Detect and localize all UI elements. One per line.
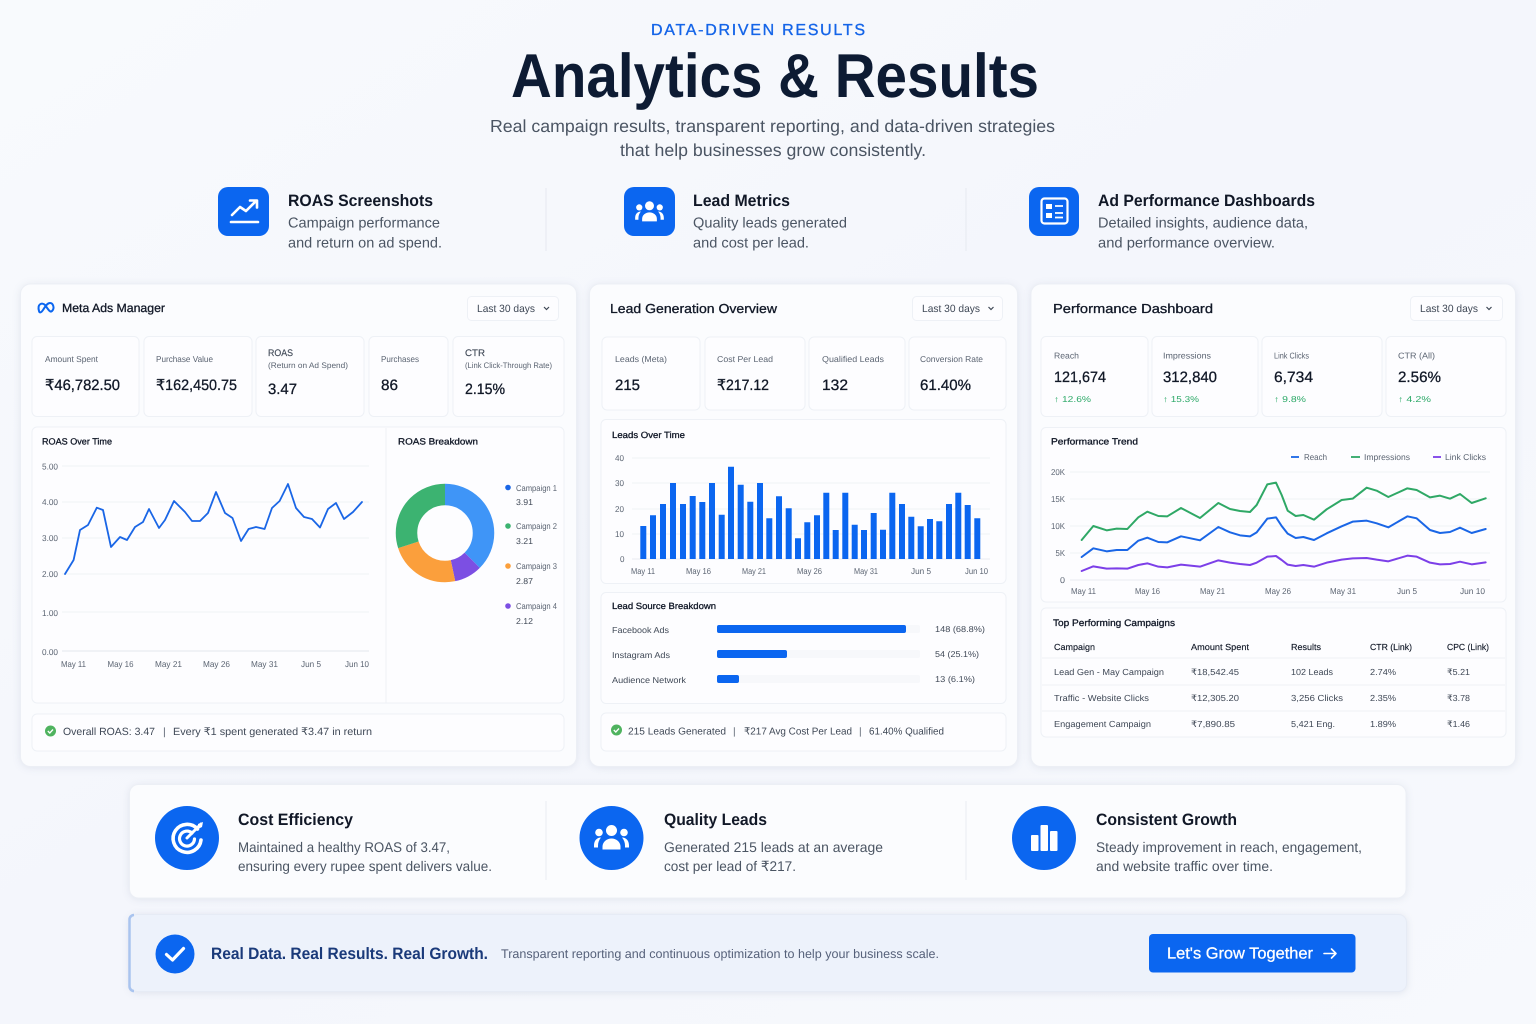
legend: Link Clicks [1445, 452, 1486, 462]
feature text: and return on ad spend. [288, 236, 442, 252]
legend: 2.12 [516, 616, 533, 626]
feature: Lead Metrics [624, 187, 847, 252]
bar chart: Leads Over Time: 30 [615, 478, 624, 488]
KPI: Cost Per Lead: Cost Per Lead [717, 354, 773, 364]
subtitle: Real campaign results, transparent reporting, and data-driven strategies [490, 116, 1055, 136]
table row: 5,421 Eng. [1291, 719, 1335, 729]
summary strip: 215 Leads Generated [628, 726, 726, 738]
summary strip: | [733, 726, 736, 738]
KPI: Cost Per Lead [705, 337, 805, 410]
benefit text: cost per lead of ₹217. [664, 858, 796, 874]
line chart: Performance Trend: May 11 [1071, 586, 1096, 596]
panel: Meta Ads Manager [20, 284, 576, 766]
source: Facebook Ads: 148 (68.8%) [935, 624, 985, 634]
line chart: ROAS Over Time: May 31 [251, 659, 278, 669]
feature text: ROAS Screenshots [288, 192, 433, 210]
table row: ₹5.21 [1447, 667, 1470, 677]
feature text: Detailed insights, audience data, [1098, 216, 1308, 232]
chart card: ROAS [32, 427, 564, 703]
KPI: Purchases: 86 [381, 377, 398, 394]
panel: Performance Dashboard [1031, 284, 1516, 766]
source: Instagram Ads [612, 649, 979, 660]
line chart: ROAS Over Time: ROAS Over Time [42, 436, 112, 446]
donut chart: ROAS Breakdown [398, 436, 557, 626]
bar chart: Leads Over Time: May 11 [631, 566, 655, 576]
KPI: Reach: Reach [1054, 350, 1079, 360]
summary strip [601, 713, 1006, 751]
eyebrow: DATA-DRIVEN RESULTS [651, 22, 865, 39]
icon: bars [1012, 806, 1076, 870]
bar chart: Leads Over Time: 40 [615, 453, 624, 463]
KPI: CTR (All): 2.56% [1398, 369, 1441, 386]
feature text [288, 192, 442, 252]
feature text: and performance overview. [1098, 236, 1275, 252]
line chart: ROAS Over Time: Jun 5 [301, 659, 321, 669]
benefit text: Consistent Growth [1096, 811, 1237, 829]
KPI: ROAS: ROAS [268, 348, 293, 359]
benefit text: ensuring every rupee spent delivers value. [238, 858, 492, 874]
subtitle [490, 116, 1055, 160]
table row [1054, 693, 1470, 703]
KPI: CTR: (Link Click-Through Rate) [465, 361, 552, 370]
table header: CTR (Link) [1370, 642, 1412, 652]
benefit text: Maintained a healthy ROAS of 3.47, [238, 839, 450, 855]
table row: Traffic - Website Clicks [1054, 693, 1150, 703]
icon: people [624, 187, 675, 236]
KPI: Impressions: 312,840 [1163, 369, 1217, 386]
bar chart: Leads Over Time: 20 [615, 504, 624, 514]
icon: dashboard [1029, 187, 1079, 236]
KPI: Reach: 121,674 [1054, 369, 1106, 386]
line chart: ROAS Over Time: 1.00 [42, 608, 58, 618]
table: Top Performing Campaigns: Top Performing Campaigns [1053, 618, 1175, 629]
source: Facebook Ads [612, 624, 985, 635]
subtitle: that help businesses grow consistently. [620, 140, 926, 160]
feature text [693, 192, 847, 252]
donut chart: ROAS Breakdown: ROAS Breakdown [398, 436, 478, 446]
icon: target [155, 806, 219, 870]
source: Instagram Ads: Instagram Ads [612, 650, 670, 660]
table row [1054, 667, 1470, 677]
KPI: Purchase Value [144, 336, 252, 416]
KPI: Purchase Value: Purchase Value [156, 354, 213, 364]
icon: people [580, 806, 644, 870]
line chart: ROAS Over Time: 2.00 [42, 569, 58, 579]
panel: benefits [130, 784, 1406, 898]
KPI: Link Clicks: Link Clicks [1274, 350, 1309, 360]
table header: Amount Spent [1191, 642, 1250, 652]
banner description: Transparent reporting and continuous optimization to help your business scale. [501, 947, 939, 961]
date dropdown: Last 30 days [1420, 303, 1478, 315]
line chart: Performance Trend: 20K [1051, 467, 1065, 477]
benefit text: and website traffic over time. [1096, 858, 1273, 874]
KPI: Amount Spent: Amount Spent [45, 354, 99, 364]
summary strip [32, 714, 564, 751]
line chart: ROAS Over Time: May 11 [61, 659, 86, 669]
benefit: Consistent Growth [1012, 806, 1362, 874]
summary strip: Overall ROAS: 3.47 [63, 726, 155, 738]
legend: 2.87 [516, 576, 533, 586]
table row [1054, 719, 1470, 729]
benefit: Cost Efficiency [155, 806, 492, 874]
benefit: Quality Leads [580, 806, 883, 874]
feature: Ad Performance Dashboards [1029, 187, 1315, 252]
KPI: Link Clicks [1262, 336, 1382, 416]
date dropdown [1410, 296, 1502, 320]
table row: ₹1.46 [1447, 719, 1470, 729]
KPI: Leads (Meta): 215 [615, 377, 640, 394]
legend: 3.21 [516, 536, 533, 546]
bar chart: Leads Over Time: May 21 [742, 566, 766, 576]
line chart: Performance Trend: Jun 10 [1460, 586, 1485, 596]
KPI: CTR [453, 336, 564, 416]
benefit text: Cost Efficiency [238, 811, 354, 829]
KPI: Amount Spent: ₹46,782.50 [45, 377, 120, 394]
table row: 3,256 Clicks [1291, 693, 1344, 703]
line chart: Performance Trend: Jun 5 [1397, 586, 1417, 596]
legend: Campaign 2 [516, 521, 557, 531]
button [1149, 934, 1356, 972]
source: Instagram Ads: 54 (25.1%) [935, 649, 979, 659]
summary strip: ₹217 Avg Cost Per Lead [744, 726, 852, 738]
table header: Results [1291, 642, 1322, 652]
summary strip: | [859, 726, 862, 738]
legend: Campaign 3 [516, 561, 557, 571]
summary strip: Every ₹1 spent generated ₹3.47 in return [173, 726, 372, 738]
KPI: CTR: CTR [465, 348, 485, 359]
feature text: Campaign performance [288, 216, 440, 232]
call to action banner [130, 914, 1406, 992]
table row: Engagement Campaign [1054, 719, 1151, 729]
benefit text [1096, 811, 1362, 874]
KPI: Impressions [1152, 336, 1258, 416]
KPI: Purchase Value: ₹162,450.75 [156, 377, 237, 394]
KPI: ROAS [256, 336, 364, 416]
line chart: Performance Trend: 5K [1056, 548, 1065, 558]
bar chart: Leads Over Time: Jun 5 [911, 566, 931, 576]
line chart: Performance Trend: May 26 [1265, 586, 1291, 596]
feature row [218, 187, 1315, 252]
line chart: Performance Trend: 15K [1051, 494, 1065, 504]
benefit text: Generated 215 leads at an average [664, 839, 883, 855]
KPI: ROAS: 3.47 [268, 381, 297, 398]
line chart: Performance Trend [1041, 428, 1506, 602]
line chart: ROAS Over Time: 5.00 [42, 462, 58, 472]
legend: Impressions [1364, 452, 1410, 462]
bar chart: Leads Over Time: 10 [615, 529, 624, 539]
KPI: Reach: ↑ 12.6% [1054, 394, 1092, 404]
table row: ₹12,305.20 [1191, 693, 1239, 703]
table row: ₹3.78 [1447, 693, 1470, 703]
table row: Lead Gen - May Campaign [1054, 667, 1164, 677]
table header: CPC (Link) [1447, 642, 1489, 652]
table header [1054, 642, 1489, 652]
KPI: ROAS: (Return on Ad Spend) [268, 361, 348, 370]
KPI: CTR: 2.15% [465, 381, 505, 398]
legend: Campaign 1 [516, 483, 557, 493]
line chart: ROAS Over Time [42, 436, 369, 669]
KPI: Link Clicks: 6,734 [1274, 369, 1313, 386]
bar chart: Leads Over Time [601, 420, 1006, 584]
benefit text [238, 811, 492, 874]
KPI: Qualified Leads: 132 [822, 377, 848, 394]
KPI: Qualified Leads: Qualified Leads [822, 354, 884, 364]
panel title: Lead Generation Overview [610, 301, 778, 316]
table: Top Performing Campaigns [1041, 608, 1506, 737]
bar chart: Leads Over Time: 0 [620, 554, 625, 564]
table row: 1.89% [1370, 719, 1396, 729]
legend: Reach [1304, 452, 1327, 462]
line chart: Performance Trend: May 21 [1200, 586, 1225, 596]
KPI: Reach [1041, 336, 1148, 416]
line chart: ROAS Over Time: 4.00 [42, 497, 58, 507]
source: Facebook Ads: Facebook Ads [612, 625, 669, 635]
button: Let's Grow Together [1167, 946, 1314, 962]
summary strip: 61.40% Qualified [869, 726, 944, 738]
feature text [1098, 192, 1315, 252]
table row: 2.74% [1370, 667, 1396, 677]
bar chart: Leads Over Time: Leads Over Time [612, 430, 685, 440]
date dropdown: Last 30 days [922, 303, 980, 315]
KPI: CTR (All): CTR (All) [1398, 350, 1435, 360]
benefit text [664, 811, 883, 874]
feature text: and cost per lead. [693, 236, 809, 252]
date dropdown [468, 296, 558, 320]
KPI: CTR (All): ↑ 4.2% [1398, 394, 1432, 404]
legend: Campaign 4 [516, 601, 557, 611]
line chart: ROAS Over Time: Jun 10 [345, 659, 369, 669]
line chart: ROAS Over Time: May 21 [155, 659, 182, 669]
table row: 2.35% [1370, 693, 1396, 703]
line chart: ROAS Over Time: May 16 [108, 659, 134, 669]
line chart: Performance Trend: Performance Trend [1051, 436, 1138, 446]
header [490, 22, 1055, 160]
KPI: Conversion Rate: 61.40% [920, 377, 971, 394]
benefit text: Quality Leads [664, 811, 767, 829]
line chart: Performance Trend: 10K [1051, 521, 1065, 531]
KPI: Qualified Leads [809, 337, 905, 410]
line chart: Performance Trend: May 16 [1135, 586, 1160, 596]
KPI: Leads (Meta) [602, 337, 700, 410]
table row: ₹18,542.45 [1191, 667, 1239, 677]
line chart: ROAS Over Time: 0.00 [42, 647, 58, 657]
KPI: Conversion Rate [909, 337, 1006, 410]
tagline: Real Data. Real Results. Real Growth. [211, 945, 488, 963]
legend [505, 483, 557, 626]
KPI: Conversion Rate: Conversion Rate [920, 354, 983, 364]
panel title: Meta Ads Manager [62, 301, 165, 315]
icon: check [156, 934, 194, 974]
bar list: Lead Source Breakdown: Lead Source Breakdown [612, 601, 716, 611]
table row: 102 Leads [1291, 667, 1334, 677]
KPI: Link Clicks: ↑ 9.8% [1274, 394, 1307, 404]
panel: Lead Generation Overview [590, 284, 1018, 766]
line chart: Performance Trend: May 31 [1330, 586, 1356, 596]
KPI: Purchases: Purchases [381, 354, 419, 364]
summary strip: | [163, 726, 166, 738]
bar chart: Leads Over Time: May 31 [854, 566, 878, 576]
title: Analytics & Results [511, 42, 1039, 111]
line chart: ROAS Over Time: May 26 [203, 659, 230, 669]
line chart: Performance Trend: 0 [1060, 575, 1065, 585]
legend: 3.91 [516, 497, 533, 507]
feature text: Quality leads generated [693, 216, 847, 232]
source: Audience Network: 13 (6.1%) [935, 674, 975, 684]
icon: trend chart [218, 187, 269, 236]
legend [1291, 452, 1486, 462]
KPI: CTR (All) [1386, 336, 1506, 416]
bar chart: Leads Over Time: May 26 [797, 566, 822, 576]
KPI: Impressions: Impressions [1163, 350, 1211, 360]
source: Audience Network [612, 674, 975, 685]
KPI: Amount Spent [32, 336, 139, 416]
KPI: Purchases [369, 336, 448, 416]
table row: ₹7,890.85 [1191, 719, 1235, 729]
date dropdown: Last 30 days [477, 303, 535, 315]
table header: Campaign [1054, 642, 1095, 652]
benefit text: Steady improvement in reach, engagement, [1096, 839, 1362, 855]
KPI: Cost Per Lead: ₹217.12 [717, 377, 769, 394]
source: Audience Network: Audience Network [612, 675, 687, 685]
panel title: Performance Dashboard [1053, 301, 1213, 316]
KPI: Impressions: ↑ 15.3% [1163, 394, 1200, 404]
line chart: ROAS Over Time: 3.00 [42, 533, 58, 543]
bar list: Lead Source Breakdown [601, 592, 1006, 704]
feature text: Lead Metrics [693, 192, 790, 210]
bar chart: Leads Over Time: May 16 [686, 566, 711, 576]
bar chart: Leads Over Time: Jun 10 [965, 566, 988, 576]
icon: meta logo [39, 303, 53, 312]
KPI: Leads (Meta): Leads (Meta) [615, 354, 667, 364]
feature: ROAS Screenshots [218, 187, 442, 252]
date dropdown [912, 296, 1002, 320]
feature text: Ad Performance Dashboards [1098, 192, 1315, 210]
